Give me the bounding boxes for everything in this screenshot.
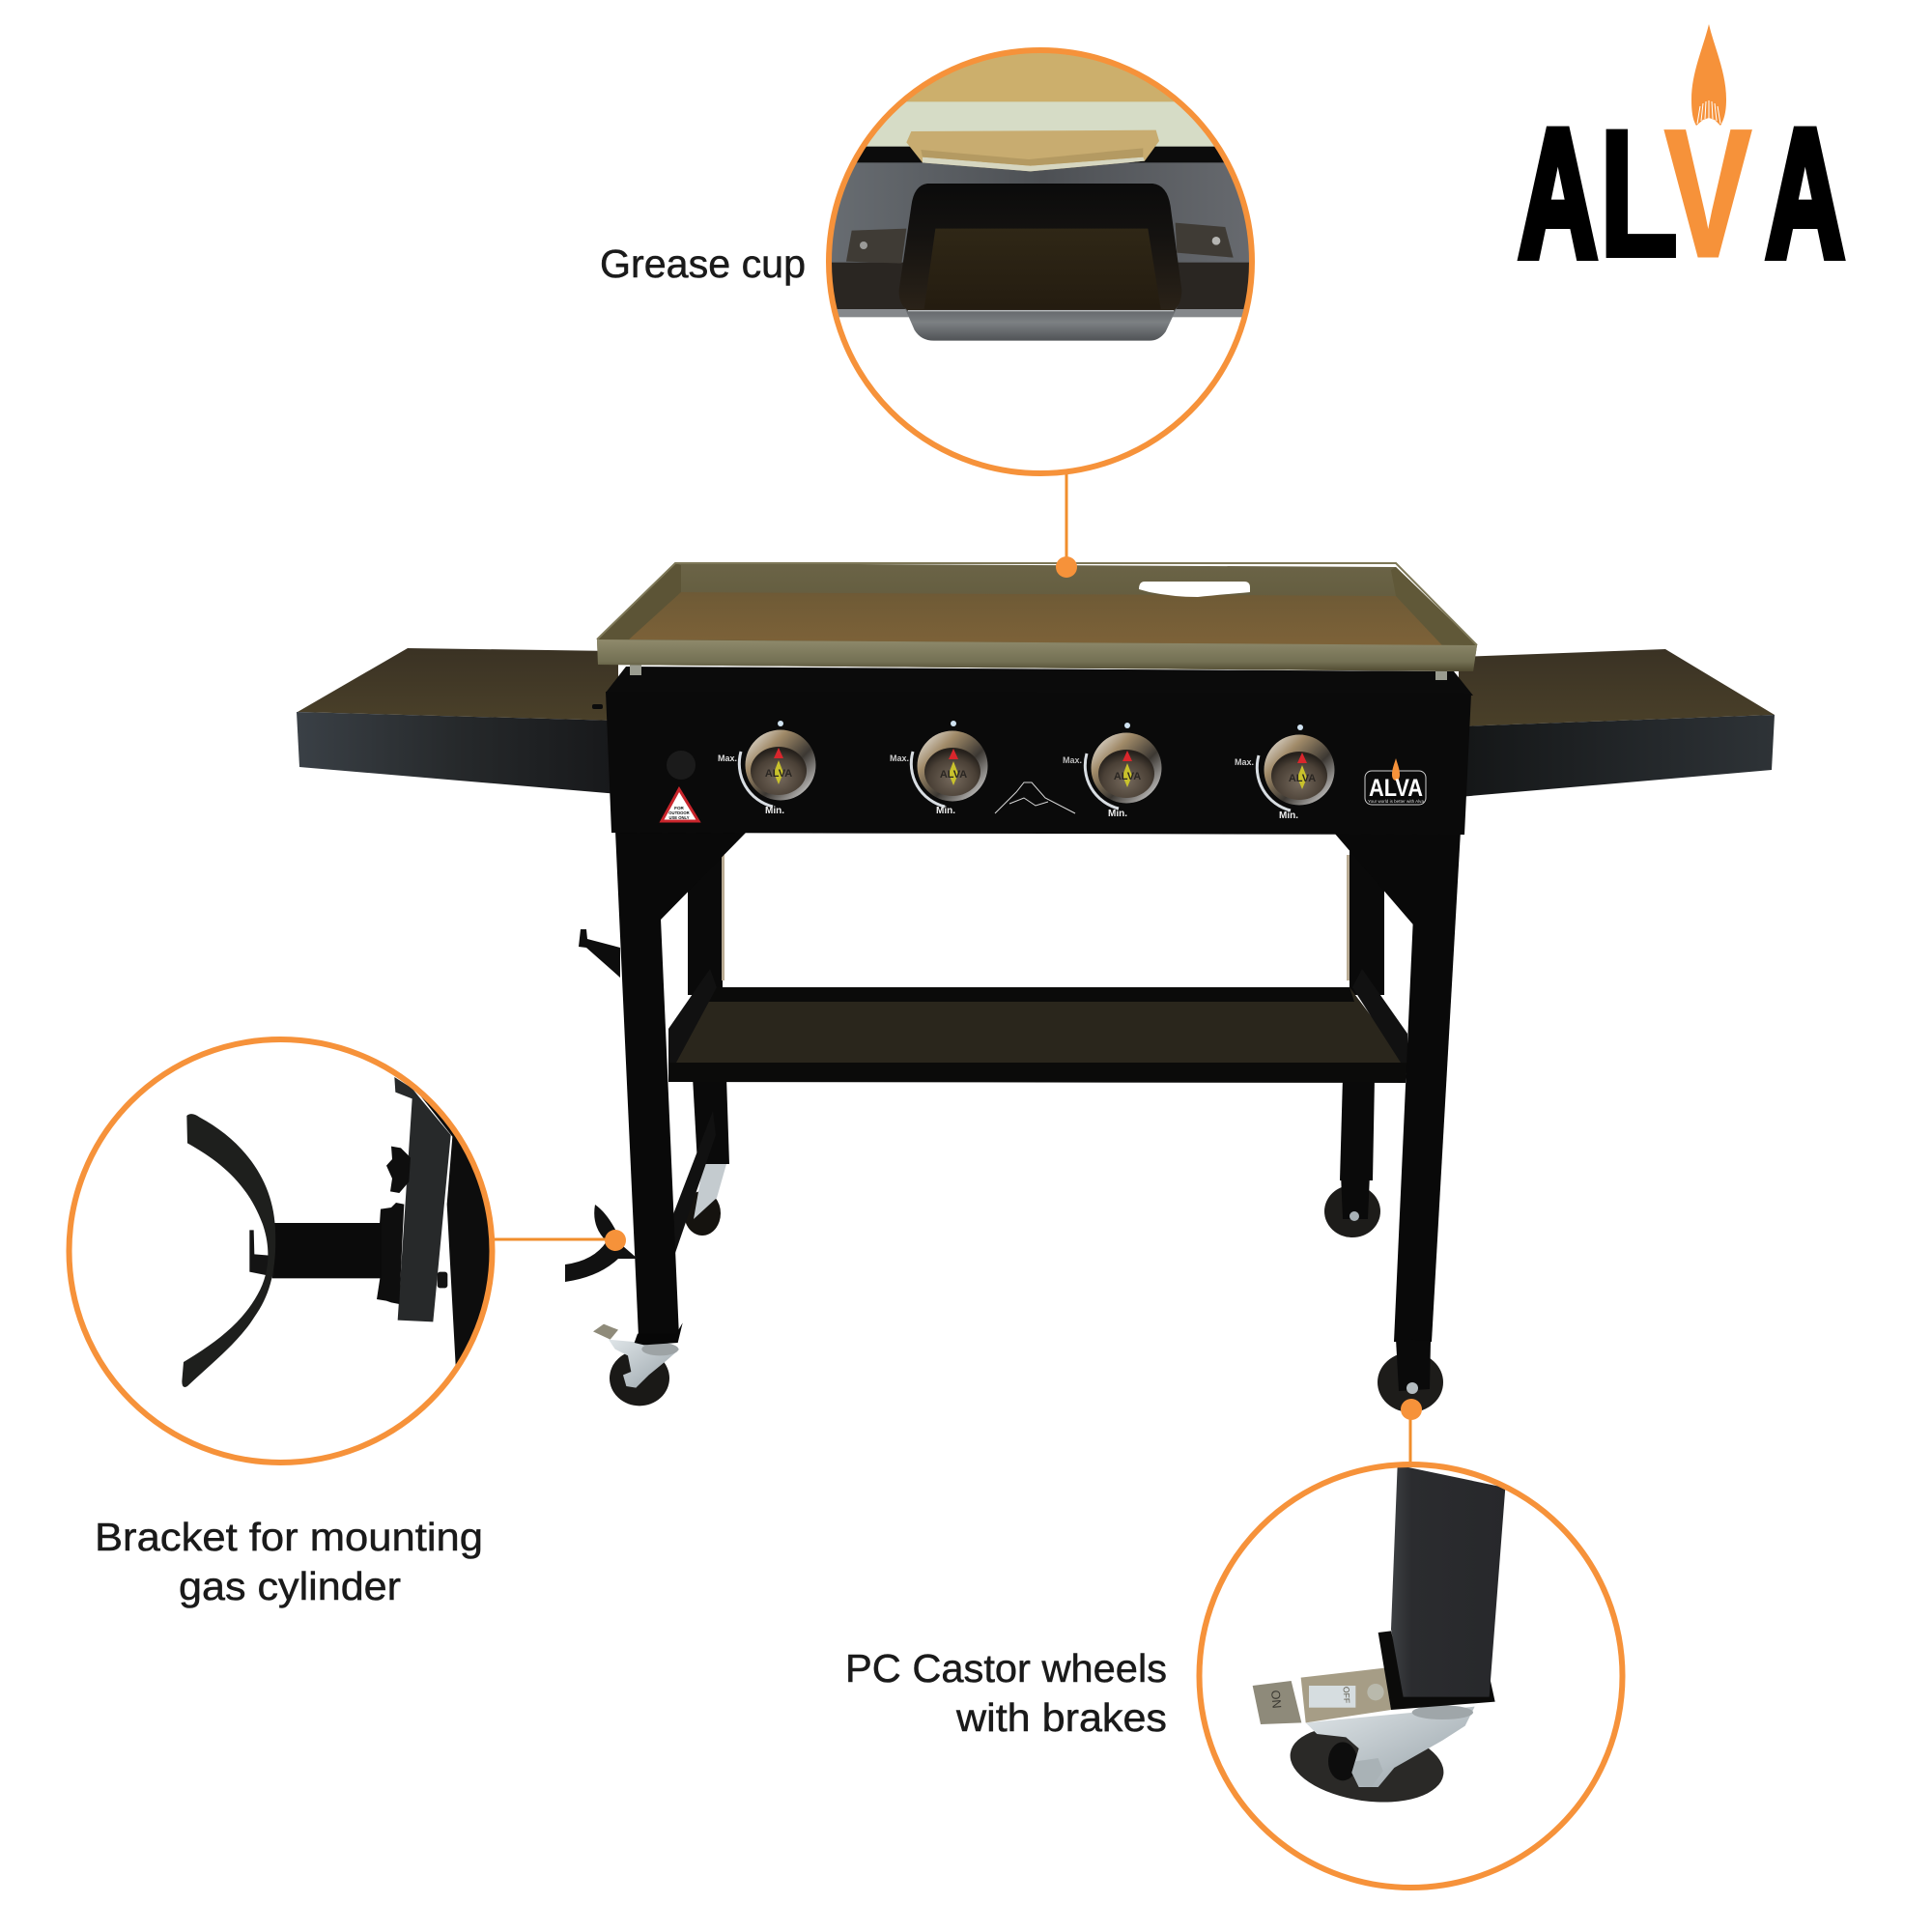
front right leg with gusset	[1334, 831, 1461, 1342]
rear legs	[688, 831, 1384, 1180]
warning triangle: OUTDOOR	[668, 810, 690, 815]
axle bolt	[1351, 1758, 1383, 1787]
callout circle: grease cup	[811, 39, 1275, 473]
gold spout	[906, 130, 1159, 171]
brake pedal	[1253, 1681, 1301, 1724]
knob 2: ALVA	[940, 769, 967, 781]
front left leg with gusset	[615, 831, 746, 1337]
knob 2: Max.	[890, 753, 909, 763]
knob 4: Max.	[1235, 757, 1254, 767]
callout circle: bracket	[70, 1039, 512, 1463]
rear wheels	[684, 1164, 1380, 1237]
flange and nuts	[377, 1203, 404, 1304]
wheel	[610, 1350, 669, 1406]
swivel washer	[1412, 1705, 1473, 1719]
knob 3: Min.	[1108, 809, 1127, 819]
cup floor	[929, 228, 1155, 277]
callout circle: castor	[1200, 1464, 1623, 1888]
swivel washer	[641, 1343, 678, 1355]
logo letter L: L	[1599, 92, 1679, 295]
connector: bracket	[493, 1230, 626, 1251]
knob 2: Min.	[936, 806, 955, 816]
brake plate	[1301, 1668, 1391, 1722]
grey body	[811, 162, 1275, 263]
control panel	[606, 692, 1471, 835]
left tab	[846, 229, 906, 264]
griddle product	[297, 563, 1775, 1412]
griddle pale edge	[867, 101, 1214, 147]
upper bracket hook	[579, 929, 620, 978]
base plate	[635, 1322, 683, 1345]
logo flame	[1691, 24, 1726, 126]
wing knob upper	[386, 1147, 411, 1193]
lower dark strip	[832, 263, 1249, 309]
arm	[272, 1223, 382, 1278]
igniter button	[667, 751, 696, 780]
square leg	[1391, 1465, 1505, 1697]
panel logo badge	[1365, 758, 1426, 805]
left side shelf	[297, 648, 618, 794]
front right caster	[1378, 1339, 1443, 1412]
cup front wall	[903, 304, 1179, 341]
label: castor wheels: with brakes	[955, 1695, 1167, 1740]
knob 4	[1235, 724, 1335, 821]
brake pedal: ON	[1268, 1690, 1284, 1709]
griddle supports	[630, 663, 1447, 680]
griddle top plate	[597, 563, 1477, 671]
panel logo badge: ALVA	[1369, 775, 1423, 802]
knob 4: ALVA	[1289, 773, 1316, 784]
knob 3: ALVA	[1114, 771, 1141, 782]
brake pedal	[593, 1324, 618, 1340]
griddle under body	[606, 667, 1473, 696]
rear bolt	[438, 1272, 447, 1288]
fork	[609, 1340, 679, 1388]
label: bracket: Bracket for mounting	[95, 1515, 483, 1559]
knob 1: Max.	[718, 753, 737, 763]
mountain line art	[995, 782, 1075, 813]
knob 3: Max.	[1063, 755, 1082, 765]
knob 1: Min.	[765, 806, 784, 816]
warning triangle: USE ONLY	[668, 815, 690, 820]
logo letter A: A	[1519, 92, 1597, 295]
gas cylinder bracket	[565, 1205, 638, 1282]
label: bracket: gas cylinder	[179, 1564, 401, 1608]
panel logo badge: Your world is better with Alva	[1368, 799, 1424, 804]
mounting plate	[1378, 1631, 1495, 1710]
label: bracket	[95, 1515, 483, 1608]
label: grease cup: Grease cup	[600, 242, 806, 286]
knob 3	[1063, 723, 1161, 819]
knob 4: Min.	[1279, 810, 1298, 821]
castor wheel	[1291, 1731, 1443, 1803]
warning triangle	[662, 789, 698, 821]
warning triangle: FOR	[674, 806, 685, 810]
right side shelf	[1459, 649, 1775, 797]
griddle notch	[1139, 582, 1250, 597]
lower shelf	[668, 969, 1407, 1083]
griddle gold plate	[906, 53, 1175, 102]
knob 2	[890, 721, 987, 816]
connector: castor	[1401, 1399, 1422, 1463]
right tab	[1176, 223, 1234, 258]
hook	[249, 1230, 273, 1277]
lower grey strip	[837, 309, 1244, 317]
cup interior	[899, 184, 1181, 311]
cup rim highlight	[908, 310, 1174, 311]
connector: grease cup	[1056, 473, 1077, 578]
logo letter V: V	[1664, 92, 1751, 295]
dark leg	[421, 1096, 489, 1365]
dark band	[857, 147, 1225, 162]
knob 1: ALVA	[765, 768, 792, 780]
label: castor wheels: PC Castor wheels	[845, 1646, 1167, 1690]
knob 1	[718, 721, 815, 816]
label: castor wheels	[845, 1646, 1167, 1740]
castor fork	[1306, 1707, 1475, 1787]
mounting plate	[394, 1077, 451, 1321]
crescent holder	[182, 1114, 275, 1387]
front left caster	[593, 1322, 683, 1406]
logo letter A second: A	[1766, 92, 1844, 295]
rear diagonal brace	[671, 1111, 716, 1256]
brake plate: OFF	[1342, 1687, 1351, 1703]
